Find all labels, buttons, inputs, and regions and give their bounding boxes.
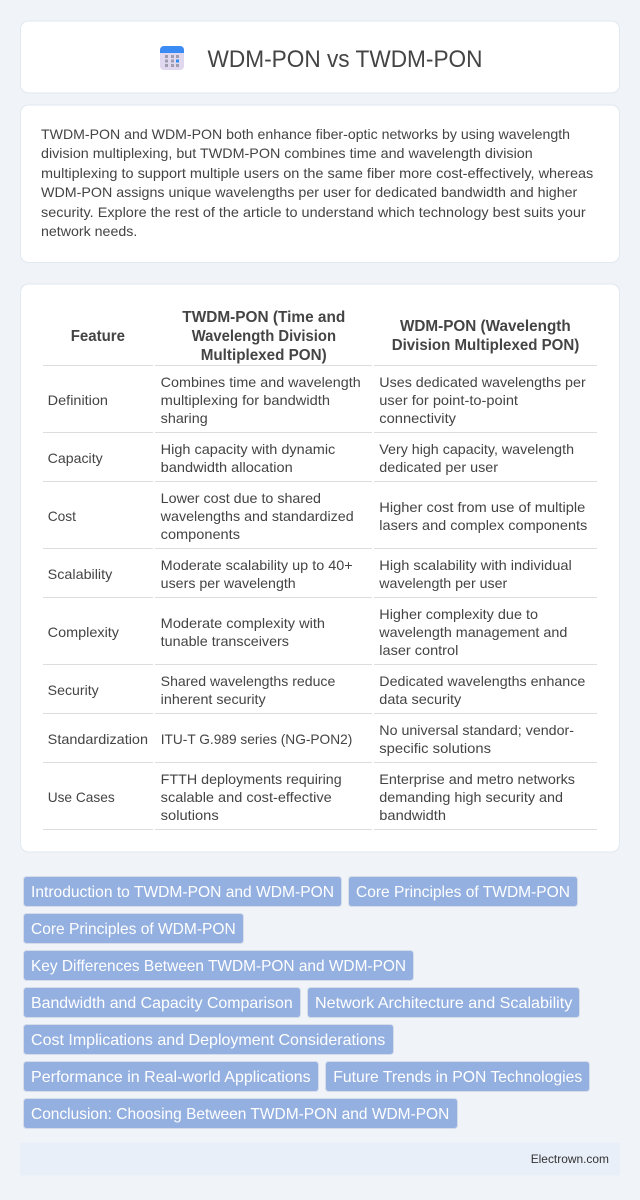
tag: Cost Implications: Cost Implications and Deployment Considerations: [31, 1032, 385, 1049]
footer: [20, 1142, 620, 1176]
tag: Network Architecture: [308, 988, 580, 1018]
row: Security: [43, 673, 597, 714]
tag: Performance: Performance in Real-world Applications: [31, 1069, 311, 1086]
panel: introduction: [20, 105, 620, 262]
row: Definition: connectivity: [379, 410, 456, 426]
row: Complexity: tunable transceivers: [161, 633, 289, 649]
row: Use Cases: [43, 771, 597, 830]
row: Complexity: wavelength management and: [378, 624, 567, 640]
row: Scalability: High scalability with individual: [379, 557, 572, 573]
title: WDM-PON vs TWDM-PON: [208, 46, 482, 73]
row: Standardization: No universal standard; vendor-: [379, 722, 574, 738]
row: Security: data security: [379, 691, 461, 707]
row: Standardization: Standardization: [48, 731, 148, 747]
tag: Core Principles of WDM-PON: [24, 914, 244, 944]
row: Scalability: wavelength per user: [378, 575, 508, 591]
table header row: Wavelength Division: [192, 328, 336, 345]
intro paragraph: [41, 126, 593, 239]
row: Scalability: users per wavelength: [161, 575, 296, 591]
tag: Future Trends: Future Trends in PON Technologies: [333, 1069, 582, 1086]
row: Security: Dedicated wavelengths enhance: [379, 673, 586, 689]
row: Definition: Definition: [48, 392, 108, 408]
table header row: WDM-PON (Wavelength: [400, 318, 571, 335]
intro paragraph: TWDM-PON and WDM-PON both enhance fiber-optic networks by using wavelength: [41, 126, 570, 142]
table header row: TWDM-PON (Time and: [182, 309, 345, 326]
row: Use Cases: solutions: [161, 807, 219, 823]
row: Capacity: Very high capacity, wavelength: [379, 441, 574, 457]
row: Cost: [43, 490, 597, 549]
row: Cost: Higher cost from use of multiple: [379, 499, 586, 515]
tag: Cost Implications: [24, 1024, 394, 1054]
panel: comparison table: [20, 284, 620, 852]
tag: Core Principles of TWDM-PON: [348, 876, 578, 906]
row: Scalability: [43, 557, 597, 598]
tag: Key Differences: [24, 950, 414, 980]
row: Cost: wavelengths and standardized: [160, 508, 354, 524]
row: Security: inherent security: [161, 691, 266, 707]
row: Capacity: High capacity with dynamic: [161, 441, 335, 457]
intro paragraph: WDM-PON assigns unique wavelengths per user for dedicated bandwidth and higher: [41, 184, 578, 200]
intro paragraph: network needs.: [41, 223, 137, 239]
row: Scalability: Scalability: [48, 566, 112, 582]
row: Capacity: [43, 441, 597, 482]
intro paragraph: security. Explore the rest of the article to understand which technology best suits your: [41, 204, 586, 220]
tag: Performance: [24, 1062, 318, 1092]
row: Scalability: Moderate scalability up to 40+: [161, 557, 353, 573]
row: Definition: Combines time and wavelength: [161, 374, 361, 390]
tag: Conclusion: [24, 1098, 458, 1128]
row: Cost: lasers and complex components: [379, 517, 587, 533]
row: Definition: user for point-to-point: [379, 392, 518, 408]
row: Complexity: [43, 606, 597, 665]
table header row: Feature: [71, 328, 125, 345]
row: Standardization: specific solutions: [379, 740, 491, 756]
row: Capacity: dedicated per user: [379, 459, 498, 475]
icon: calendar: [160, 46, 184, 70]
tag: Future Trends: [326, 1062, 590, 1092]
row: Standardization: [43, 722, 597, 763]
row: Definition: sharing: [161, 410, 208, 426]
tag: Introduction: [24, 876, 342, 906]
panel: header: [20, 21, 620, 93]
row: Use Cases: Enterprise and metro networks: [379, 771, 575, 787]
row: Complexity: laser control: [379, 642, 458, 658]
row: Definition: [43, 374, 597, 433]
table header row: Division Multiplexed PON): [392, 337, 579, 354]
row: Definition: multiplexing for bandwidth: [161, 392, 330, 408]
footer: Electrown.com: [531, 1152, 609, 1166]
row: Definition: Uses dedicated wavelengths per: [379, 374, 586, 390]
table header row: [43, 309, 597, 366]
row: Complexity: Complexity: [48, 624, 119, 640]
topic tags: [24, 876, 590, 1128]
row: Complexity: Higher complexity due to: [379, 606, 538, 622]
row: Standardization: ITU-T G.989 series (NG-PON2): [161, 731, 352, 747]
tag: Bandwidth and Capacity: Bandwidth and Capacity Comparison: [31, 995, 293, 1012]
tag: Key Differences: Key Differences Between TWDM-PON and WDM-PON: [31, 958, 406, 975]
row: Complexity: Moderate complexity with: [161, 615, 325, 631]
intro paragraph: division multiplexing, but TWDM-PON combines time and wavelength division: [41, 145, 533, 161]
row: Cost: components: [161, 526, 240, 542]
table header row: Multiplexed PON): [201, 347, 327, 364]
tag: Network Architecture: Network Architecture and Scalability: [315, 995, 572, 1012]
row: Security: Shared wavelengths reduce: [161, 673, 336, 689]
tag: Core Principles of WDM-PON: Core Principles of WDM-PON: [31, 921, 236, 938]
row: Capacity: Capacity: [48, 450, 103, 466]
row: Use Cases: FTTH deployments requiring: [161, 771, 342, 787]
row: Cost: Cost: [48, 508, 76, 524]
row: Use Cases: demanding high security and: [379, 789, 563, 805]
tag: Core Principles of TWDM-PON: Core Principles of TWDM-PON: [356, 884, 570, 901]
intro paragraph: multiplexing to support multiple users on the same fiber more cost-effectively, whereas: [41, 165, 593, 181]
row: Use Cases: Use Cases: [48, 789, 115, 805]
tag: Introduction: Introduction to TWDM-PON and WDM-PON: [31, 884, 334, 901]
tag: Bandwidth and Capacity: [24, 988, 300, 1018]
row: Security: Security: [48, 682, 99, 698]
row: Cost: Lower cost due to shared: [161, 490, 321, 506]
tag: Conclusion: Conclusion: Choosing Between TWDM-PON and WDM-PON: [31, 1106, 449, 1123]
row: Use Cases: scalable and cost-effective: [161, 789, 332, 805]
row: Capacity: bandwidth allocation: [161, 459, 293, 475]
row: Use Cases: bandwidth: [379, 807, 446, 823]
